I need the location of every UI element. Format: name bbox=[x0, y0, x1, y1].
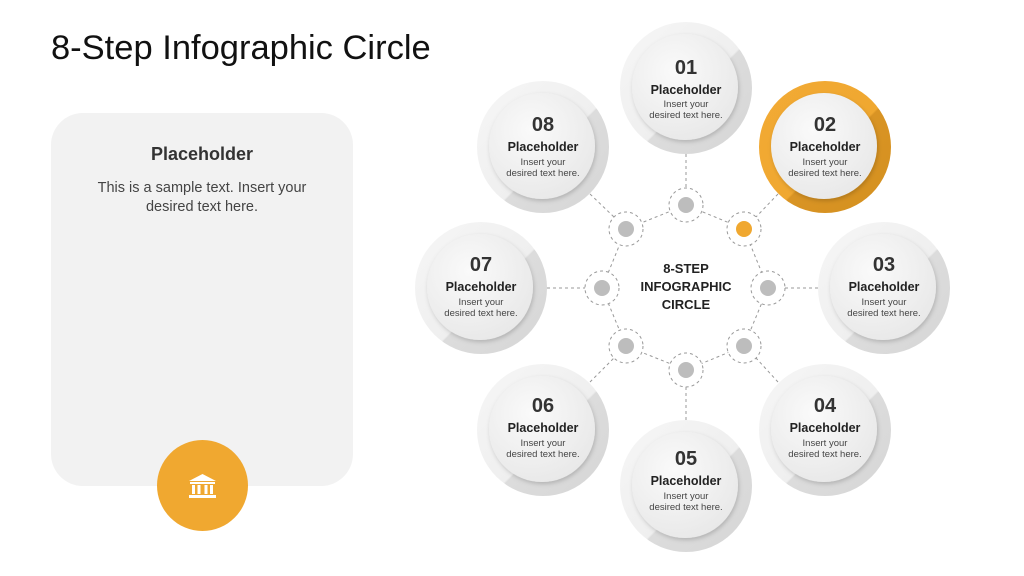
step 01 bbox=[620, 22, 752, 154]
step 04: desired text here. bbox=[788, 449, 862, 460]
step 05: Placeholder bbox=[651, 474, 722, 488]
step 02: Placeholder bbox=[790, 140, 861, 154]
step circles bbox=[415, 22, 950, 552]
step 04 bbox=[759, 364, 891, 496]
center label: CIRCLE bbox=[662, 297, 711, 312]
panel text: desired text here. bbox=[146, 199, 258, 215]
step 06 bbox=[477, 364, 609, 496]
step 06: Placeholder bbox=[508, 421, 579, 435]
step 01: Insert your bbox=[664, 99, 708, 110]
step 02: desired text here. bbox=[788, 168, 862, 179]
center label: INFOGRAPHIC bbox=[640, 279, 732, 294]
step 03: Insert your bbox=[862, 297, 906, 308]
title: 8-Step Infographic Circle bbox=[51, 29, 431, 67]
small node circles bbox=[585, 188, 785, 387]
step 08: Placeholder bbox=[508, 140, 579, 154]
center label bbox=[640, 261, 732, 312]
panel text bbox=[98, 180, 306, 215]
step 02: Insert your bbox=[803, 157, 847, 168]
center label: 8-STEP bbox=[663, 261, 709, 276]
step 06: 06 bbox=[532, 395, 554, 417]
step 08: 08 bbox=[532, 114, 554, 136]
step 07 bbox=[415, 222, 547, 354]
step 06: desired text here. bbox=[506, 449, 580, 460]
connector lines bbox=[547, 154, 818, 420]
step 07: Placeholder bbox=[446, 280, 517, 294]
step 03: desired text here. bbox=[847, 308, 921, 319]
step 02 bbox=[759, 81, 891, 213]
step 08: Insert your bbox=[521, 157, 565, 168]
step 04: 04 bbox=[814, 395, 837, 417]
step 01: Placeholder bbox=[651, 83, 722, 97]
step 05 bbox=[620, 420, 752, 552]
panel heading: Placeholder bbox=[151, 144, 253, 164]
step 06: Insert your bbox=[521, 438, 565, 449]
icon: bank in orange circle bbox=[157, 440, 248, 531]
step 03 bbox=[818, 222, 950, 354]
step 03: Placeholder bbox=[849, 280, 920, 294]
step 08: desired text here. bbox=[506, 168, 580, 179]
step 02: 02 bbox=[814, 114, 836, 136]
panel: left text box bbox=[51, 113, 353, 486]
panel text: This is a sample text. Insert your bbox=[98, 180, 306, 196]
step 08 bbox=[477, 81, 609, 213]
step 05: 05 bbox=[675, 448, 697, 470]
step 07: 07 bbox=[470, 254, 492, 276]
step 05: Insert your bbox=[664, 491, 708, 502]
step 07: desired text here. bbox=[444, 308, 518, 319]
step 07: Insert your bbox=[459, 297, 503, 308]
step 03: 03 bbox=[873, 254, 895, 276]
step 01: desired text here. bbox=[649, 110, 723, 121]
step 01: 01 bbox=[675, 57, 697, 79]
step 05: desired text here. bbox=[649, 502, 723, 513]
step 04: Placeholder bbox=[790, 421, 861, 435]
step 04: Insert your bbox=[803, 438, 847, 449]
